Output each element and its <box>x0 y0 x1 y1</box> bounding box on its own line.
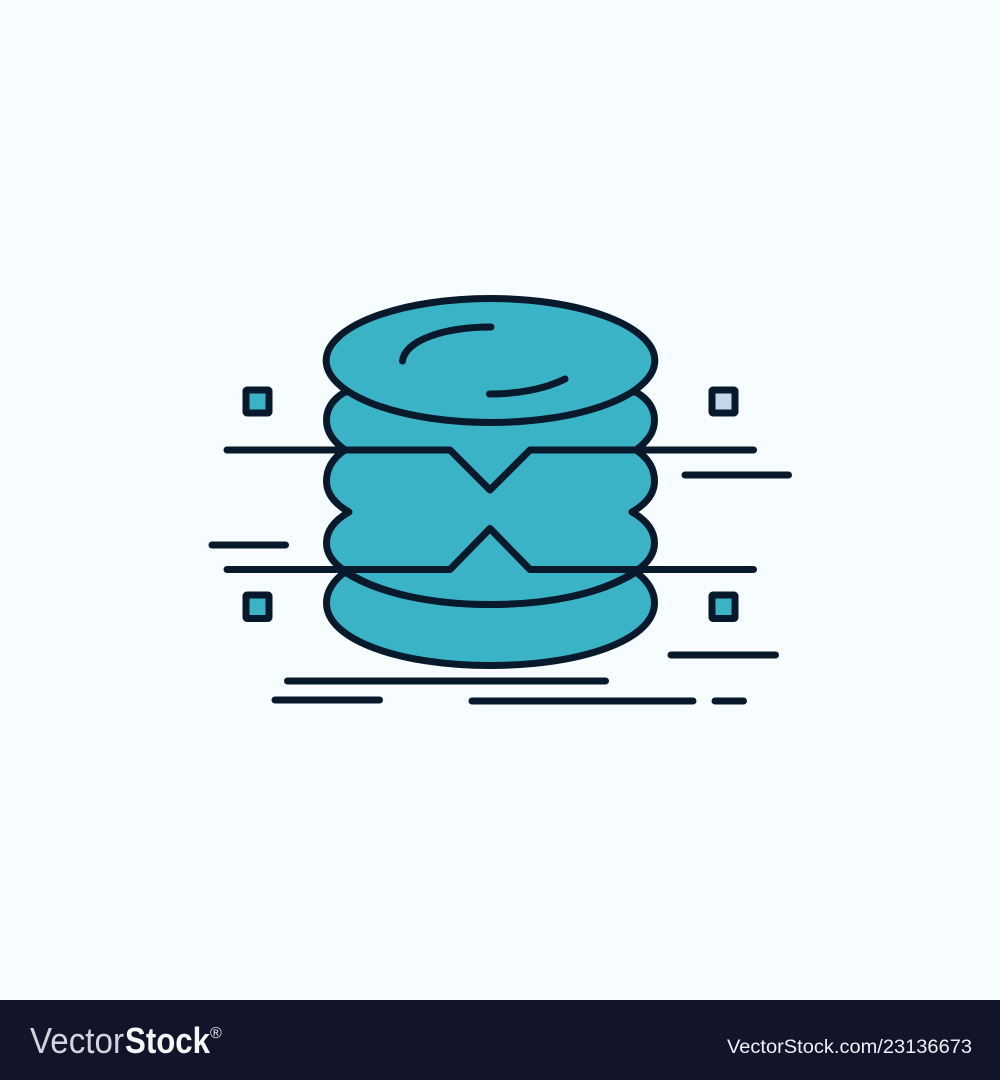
square: lower right <box>712 595 735 618</box>
connector line: upper notched <box>227 450 754 490</box>
square: upper right <box>712 390 735 413</box>
logo: Vector: Vector <box>30 1020 124 1061</box>
footer bar <box>0 1000 1000 1080</box>
connector line: lower notched <box>227 528 754 570</box>
database layer: bottom disc <box>326 572 654 666</box>
database layer: stacked middle body <box>326 392 654 604</box>
highlight: top disc lower arc <box>490 379 565 394</box>
logo: registered mark: ® <box>210 1025 222 1042</box>
icon: database stack with speed lines <box>212 298 788 701</box>
highlight: top disc upper arc <box>402 327 491 361</box>
database layer: top disc <box>326 298 655 422</box>
image id: VectorStock.com/23136673 <box>727 1037 972 1058</box>
motion lines <box>212 475 788 701</box>
logo: Stock: Stock <box>125 1020 211 1061</box>
square: lower left <box>246 595 269 618</box>
square: upper left <box>246 390 269 413</box>
